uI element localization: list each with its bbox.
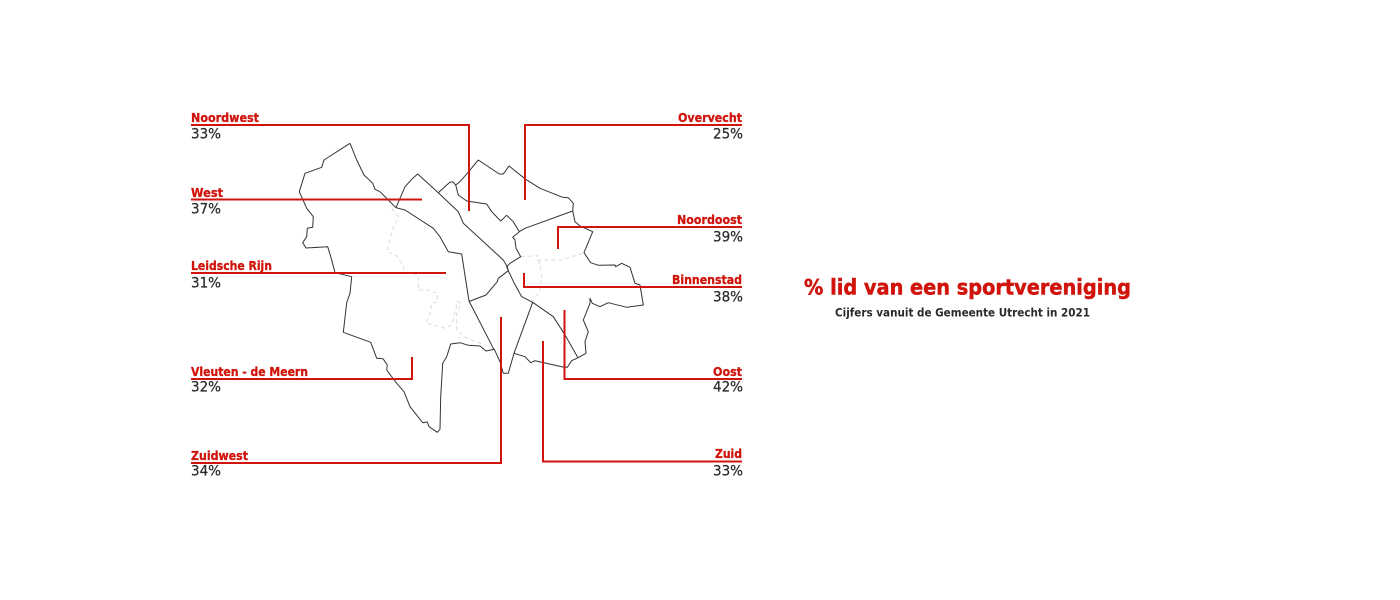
callout: Zuidwest: 34% xyxy=(191,464,221,480)
callout: Leidsche Rijn xyxy=(191,259,446,292)
callout: Vleuten - de Meern: Vleuten - de Meern xyxy=(191,365,308,379)
callout: Noordwest: 33% xyxy=(191,126,221,142)
district borders: dashed inner lines xyxy=(387,208,584,345)
callout: West: 37% xyxy=(191,202,221,218)
callout: Binnenstad xyxy=(524,273,743,306)
callout: Noordoost: 39% xyxy=(713,230,743,246)
callout: Noordoost xyxy=(558,213,743,249)
callout: Vleuten - de Meern: 32% xyxy=(191,380,221,396)
callout: Overvecht: Overvecht xyxy=(678,111,742,125)
callout: Zuidwest xyxy=(191,317,501,480)
callout: Oost xyxy=(564,310,743,396)
title: % lid van een sportvereniging xyxy=(804,276,1131,300)
callout: Zuidwest: Zuidwest xyxy=(191,449,248,463)
callout: Zuid: 33% xyxy=(713,464,743,480)
callout: Binnenstad: Binnenstad xyxy=(672,273,742,287)
callout: Zuid xyxy=(543,341,743,480)
callout: Noordoost: Noordoost xyxy=(677,213,742,227)
map: Utrecht districts xyxy=(299,143,643,432)
callout: Binnenstad: 38% xyxy=(713,290,743,306)
callout: Noordwest: Noordwest xyxy=(191,111,259,125)
callout: Leidsche Rijn: Leidsche Rijn xyxy=(191,259,272,273)
callout: Noordwest xyxy=(191,111,469,211)
callout: Overvecht: 25% xyxy=(713,126,743,142)
callout: Oost: Oost xyxy=(713,365,742,379)
subtitle: Cijfers vanuit de Gemeente Utrecht in 2021 xyxy=(835,306,1090,320)
callout: Vleuten - de Meern xyxy=(191,357,412,396)
callout: Leidsche Rijn: 31% xyxy=(191,276,221,292)
callout: Overvecht xyxy=(525,111,743,200)
callout: West: West xyxy=(191,186,223,200)
callout: Zuid: Zuid xyxy=(715,447,742,461)
callout: Oost: 42% xyxy=(713,380,743,396)
district borders: solid lines xyxy=(299,143,643,432)
callout: West xyxy=(191,186,422,218)
